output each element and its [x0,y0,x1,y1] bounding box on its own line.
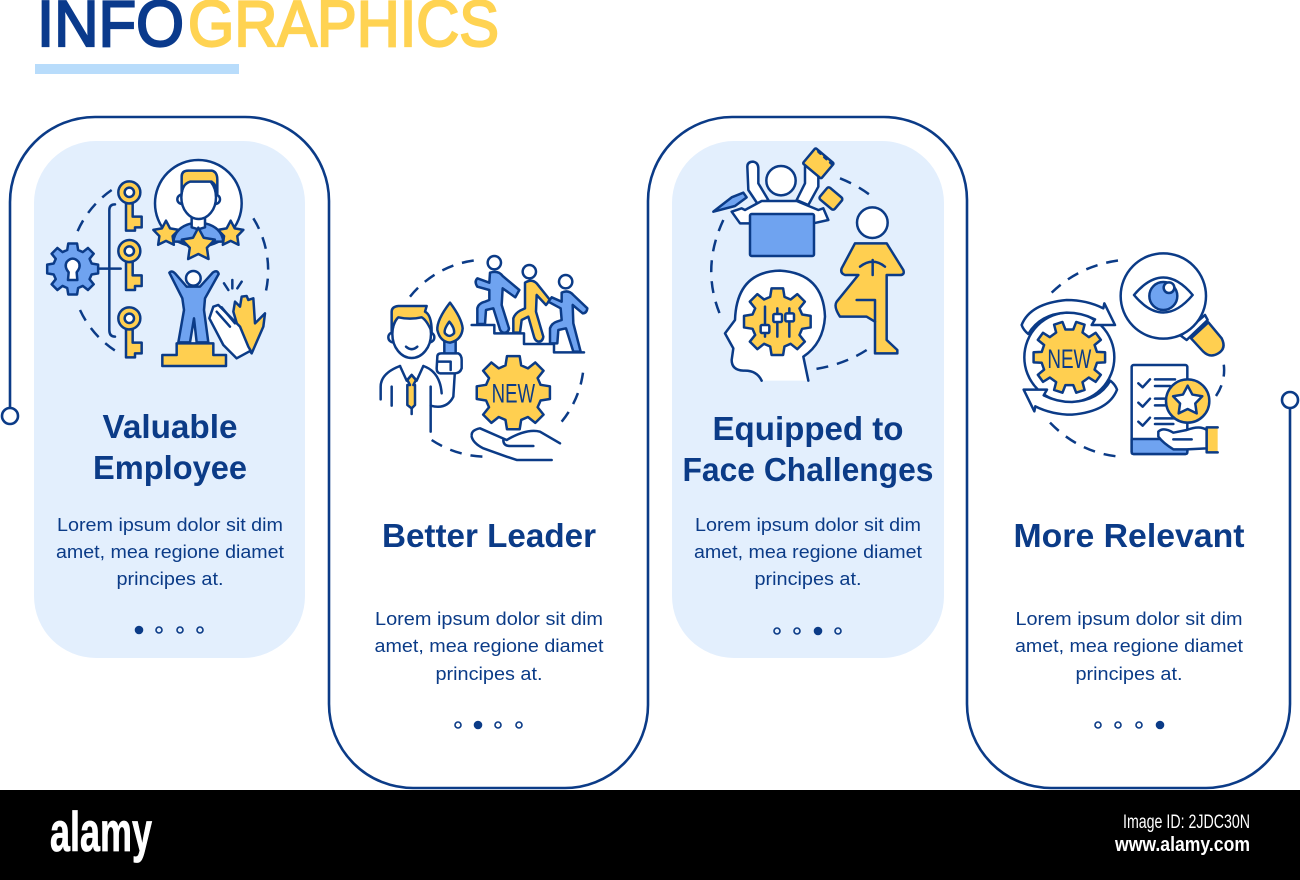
heading: Equipped to Face Challenges: Equipped to [712,410,904,447]
text block: card 1: principes at. [116,568,224,589]
icon: valuable employee [47,160,268,366]
pagination dots: card 3 [774,628,841,634]
icon: equipped to face challenges [711,148,904,381]
panel: card 1 background [34,141,305,658]
heading: Equipped to Face Challenges [682,410,934,488]
text block: card 4: amet, mea regione diamet [1015,635,1243,656]
text block: card 1: amet, mea regione diamet [56,541,284,562]
icon: more relevant [1022,253,1224,457]
text block: card 2: Lorem ipsum dolor sit dim [375,608,603,629]
text block: card 3: principes at. [754,568,862,589]
heading: Valuable Employee: Valuable [102,408,238,445]
text block: card 4 [1015,608,1243,684]
footer bar: alamy [50,800,152,863]
text block: card 2: principes at. [436,663,542,684]
footer bar: Image ID: 2JDC30N [1123,812,1250,833]
text block: card 4: principes at. [1076,663,1182,684]
icon: better leader: NEW [492,379,536,409]
footer bar [0,790,1300,880]
text block: card 1: Lorem ipsum dolor sit dim [57,514,283,535]
title [37,0,499,60]
text block: card 3: amet, mea regione diamet [694,541,922,562]
title underline bar [35,64,239,74]
footer bar: www.alamy.com [1114,834,1250,856]
text block: card 2 [374,608,604,684]
pagination dots: card 1 [136,626,203,634]
text block: card 3 [694,514,922,589]
pagination dots: card 2 [455,722,522,728]
heading: More Relevant: More Relevant [1014,517,1245,554]
icon: better leader [381,256,587,460]
heading: Better Leader: Better Leader [382,517,596,554]
text block: card 1 [56,514,284,589]
connected card outline [2,117,1298,788]
icon: more relevant: NEW [1047,344,1092,374]
heading: Valuable Employee: Employee [93,449,247,486]
pagination dots: card 4 [1095,722,1164,728]
text block: card 2: amet, mea regione diamet [374,635,604,656]
panel: card 3 background [672,141,944,658]
text block: card 4: Lorem ipsum dolor sit dim [1016,608,1242,629]
heading: Equipped to Face Challenges: Face Challenges [682,451,934,488]
heading: Valuable Employee [93,408,247,486]
text block: card 3: Lorem ipsum dolor sit dim [695,514,921,535]
